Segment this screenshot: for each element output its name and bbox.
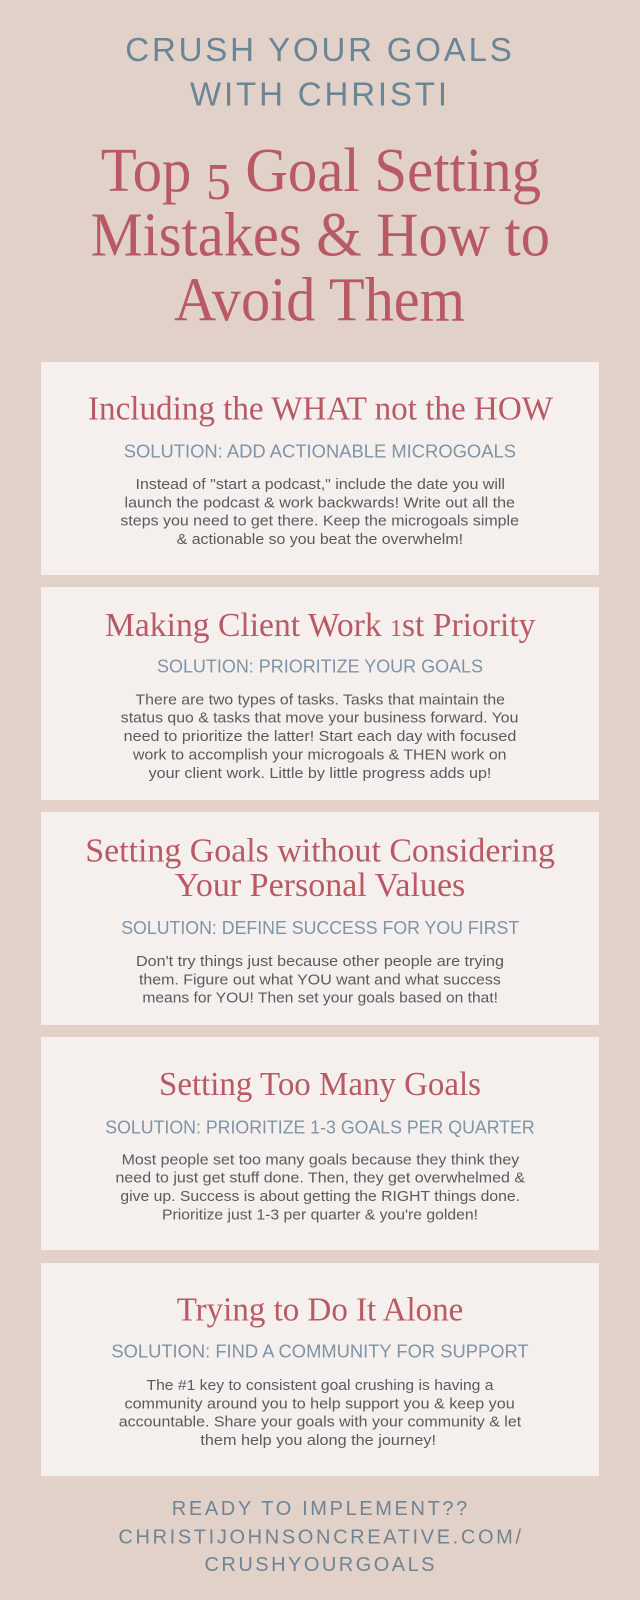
body text: mistake 2: work to accomplish your microgoals & THEN work on [132,748,507,764]
body text: mistake 3: means for YOU! Then set your goals based on that! [142,991,498,1007]
heading: setting goals without considering your personal values: Your Personal Values [175,867,465,904]
header: crush your goals with christi: WITH CHRISTI [190,75,447,112]
body text: mistake 5: The #1 key to consistent goal crushing is having a [146,1378,494,1394]
title: 5 [206,154,231,211]
body text: mistake 3: Don't try things just because other people are trying [136,954,504,970]
body text: mistake 2: need to prioritize the latter! Start each day with focused [124,729,516,745]
body text: mistake 1: steps you need to get there. Keep the microgoals simple [120,514,519,530]
body text: mistake 4: Prioritize just 1-3 per quarter & you're golden! [162,1207,478,1223]
body text: mistake 1: Instead of "start a podcast," include the date you will [136,477,505,493]
solution: define success for you first: SOLUTION: DEFINE SUCCESS FOR YOU FIRST [121,917,519,938]
body text: mistake 5 [119,1378,521,1449]
body text: mistake 5: accountable. Share your goals with your community & let [119,1415,521,1431]
solution: prioritize 1-3 goals per quarter: SOLUTION: PRIORITIZE 1-3 GOALS PER QUARTER [105,1116,535,1137]
body text: mistake 4: Most people set too many goals because they think they [122,1152,520,1168]
title: Goal Setting [231,137,541,205]
footer call to action: CHRISTIJOHNSONCREATIVE.COM/ [118,1526,521,1548]
panel: mistake 1 [41,362,599,575]
title [91,137,550,335]
title: Mistakes & How to [91,202,550,270]
body text: mistake 1: launch the podcast & work backwards! Write out all the [124,495,515,511]
solution: add actionable microgoals: SOLUTION: ADD ACTIONABLE MICROGOALS [124,440,516,461]
panel: mistake 2 [41,587,599,800]
footer call to action: CRUSHYOURGOALS [204,1554,434,1576]
body text: mistake 4 [116,1152,525,1223]
heading: trying to do it alone: Trying to Do It Alone [177,1291,463,1328]
body text: mistake 4: need to just get stuff done. Then, they get overwhelmed & [116,1171,525,1187]
body text: mistake 2: your client work. Little by little progress adds up! [149,766,491,782]
heading: setting goals without considering your personal values: Setting Goals without Considering [85,833,555,870]
header: crush your goals with christi: CRUSH YOUR GOALS [125,31,512,68]
body text: mistake 5: them help you along the journey! [200,1433,436,1449]
solution: prioritize your goals: SOLUTION: PRIORITIZE YOUR GOALS [157,656,483,677]
body text: mistake 4: give up. Success is about getting the RIGHT things done. [120,1189,520,1205]
footer call to action: READY TO IMPLEMENT?? [172,1498,467,1520]
heading: setting too many goals: Setting Too Many Goals [159,1066,481,1103]
body text: mistake 3 [136,954,504,1007]
heading: making client work 1st priority: Making Client Work 1st Priority [105,607,536,644]
title: Top [101,137,196,205]
body text: mistake 5: community around you to help support you & keep you [124,1396,515,1412]
body text: mistake 2: status quo & tasks that move your business forward. You [121,711,518,727]
panel: mistake 5 [41,1263,599,1476]
body text: mistake 3: them. Figure out what YOU want and what success [139,972,501,988]
heading: setting goals without considering your personal values [85,833,555,904]
body text: mistake 1: & actionable so you beat the overwhelm! [177,532,463,548]
panel: mistake 4 [41,1037,599,1250]
footer call to action [118,1498,521,1576]
solution: find a community for support: SOLUTION: FIND A COMMUNITY FOR SUPPORT [111,1341,529,1362]
heading: including the what not the how: Including the WHAT not the HOW [88,390,554,427]
header: crush your goals with christi [125,31,512,112]
panel: mistake 3 [41,812,599,1025]
body text: mistake 2: There are two types of tasks. Tasks that maintain the [136,692,505,708]
title: Avoid Them [174,267,465,335]
body text: mistake 1 [120,477,519,548]
body text: mistake 2 [121,692,518,782]
